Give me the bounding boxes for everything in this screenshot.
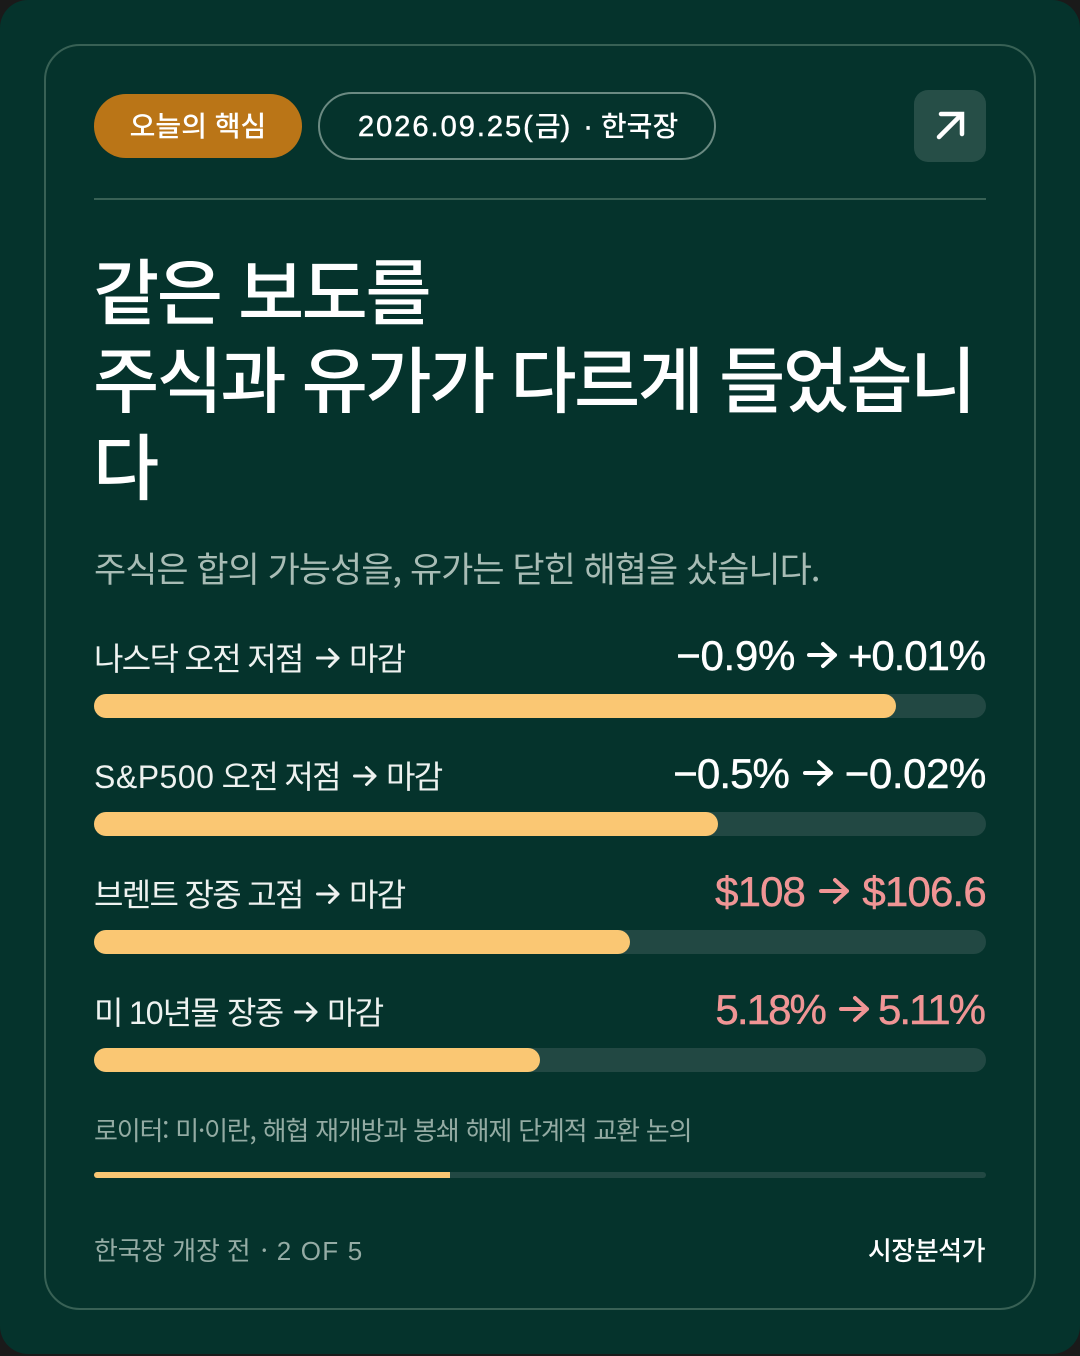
title: 같은 보도를 <box>93 235 429 340</box>
title: 주식과 유가가 다르게 들었습니 <box>93 322 974 428</box>
bar <box>94 1048 986 1072</box>
label: 나스닥 오전 저점 <box>94 634 303 680</box>
label: 마감 <box>327 988 382 1034</box>
row: US 10-year <box>94 986 986 1072</box>
icon: arrow up-right <box>914 90 986 162</box>
value: +0.01% <box>848 632 985 679</box>
footer left: 한국장 개장 전 · 2 OF 5 <box>94 1231 363 1268</box>
source note: 로이터: 미·이란, 해협 재개방과 봉쇄 해제 단계적 교환 논의 <box>94 1111 691 1148</box>
bar <box>94 812 986 836</box>
date pill: 2026.09.25(금) · 한국장 <box>358 105 678 145</box>
label: S&P500 오전 저점 <box>94 752 340 798</box>
row: S&P500 <box>94 750 986 836</box>
title <box>93 235 974 515</box>
footer right: 시장분석가 <box>868 1231 985 1268</box>
value: $108 <box>715 868 805 915</box>
label: 마감 <box>386 752 441 798</box>
value <box>676 632 985 679</box>
label: 장중 <box>227 988 282 1034</box>
subtitle: 주식은 합의 가능성을, 유가는 닫힌 해협을 샀습니다. <box>94 542 820 593</box>
value: −0.9% <box>676 632 795 679</box>
label: 10년물 <box>129 988 218 1034</box>
value: −0.5% <box>673 750 789 797</box>
label <box>94 634 406 680</box>
value: 5.11% <box>878 986 984 1033</box>
value: 5.18% <box>715 986 825 1033</box>
title: 다 <box>93 410 157 515</box>
label: 마감 <box>349 634 404 680</box>
value <box>715 868 986 915</box>
value <box>673 750 986 797</box>
label: 미 <box>94 988 122 1034</box>
divider <box>94 198 986 200</box>
label: 브렌트 장중 고점 <box>94 870 303 916</box>
label: 마감 <box>349 870 404 916</box>
label <box>94 870 406 916</box>
progress bar <box>94 1172 986 1178</box>
badge: today's key point <box>94 94 302 158</box>
bar <box>94 694 986 718</box>
value: −0.02% <box>845 750 986 797</box>
row: Brent <box>94 868 986 954</box>
badge: today's key point: 오늘의 핵심 <box>130 105 266 145</box>
row: Nasdaq <box>94 632 986 718</box>
label <box>94 988 384 1034</box>
bar <box>94 930 986 954</box>
value: $106.6 <box>862 868 986 915</box>
date pill <box>318 92 716 160</box>
value <box>715 986 985 1033</box>
